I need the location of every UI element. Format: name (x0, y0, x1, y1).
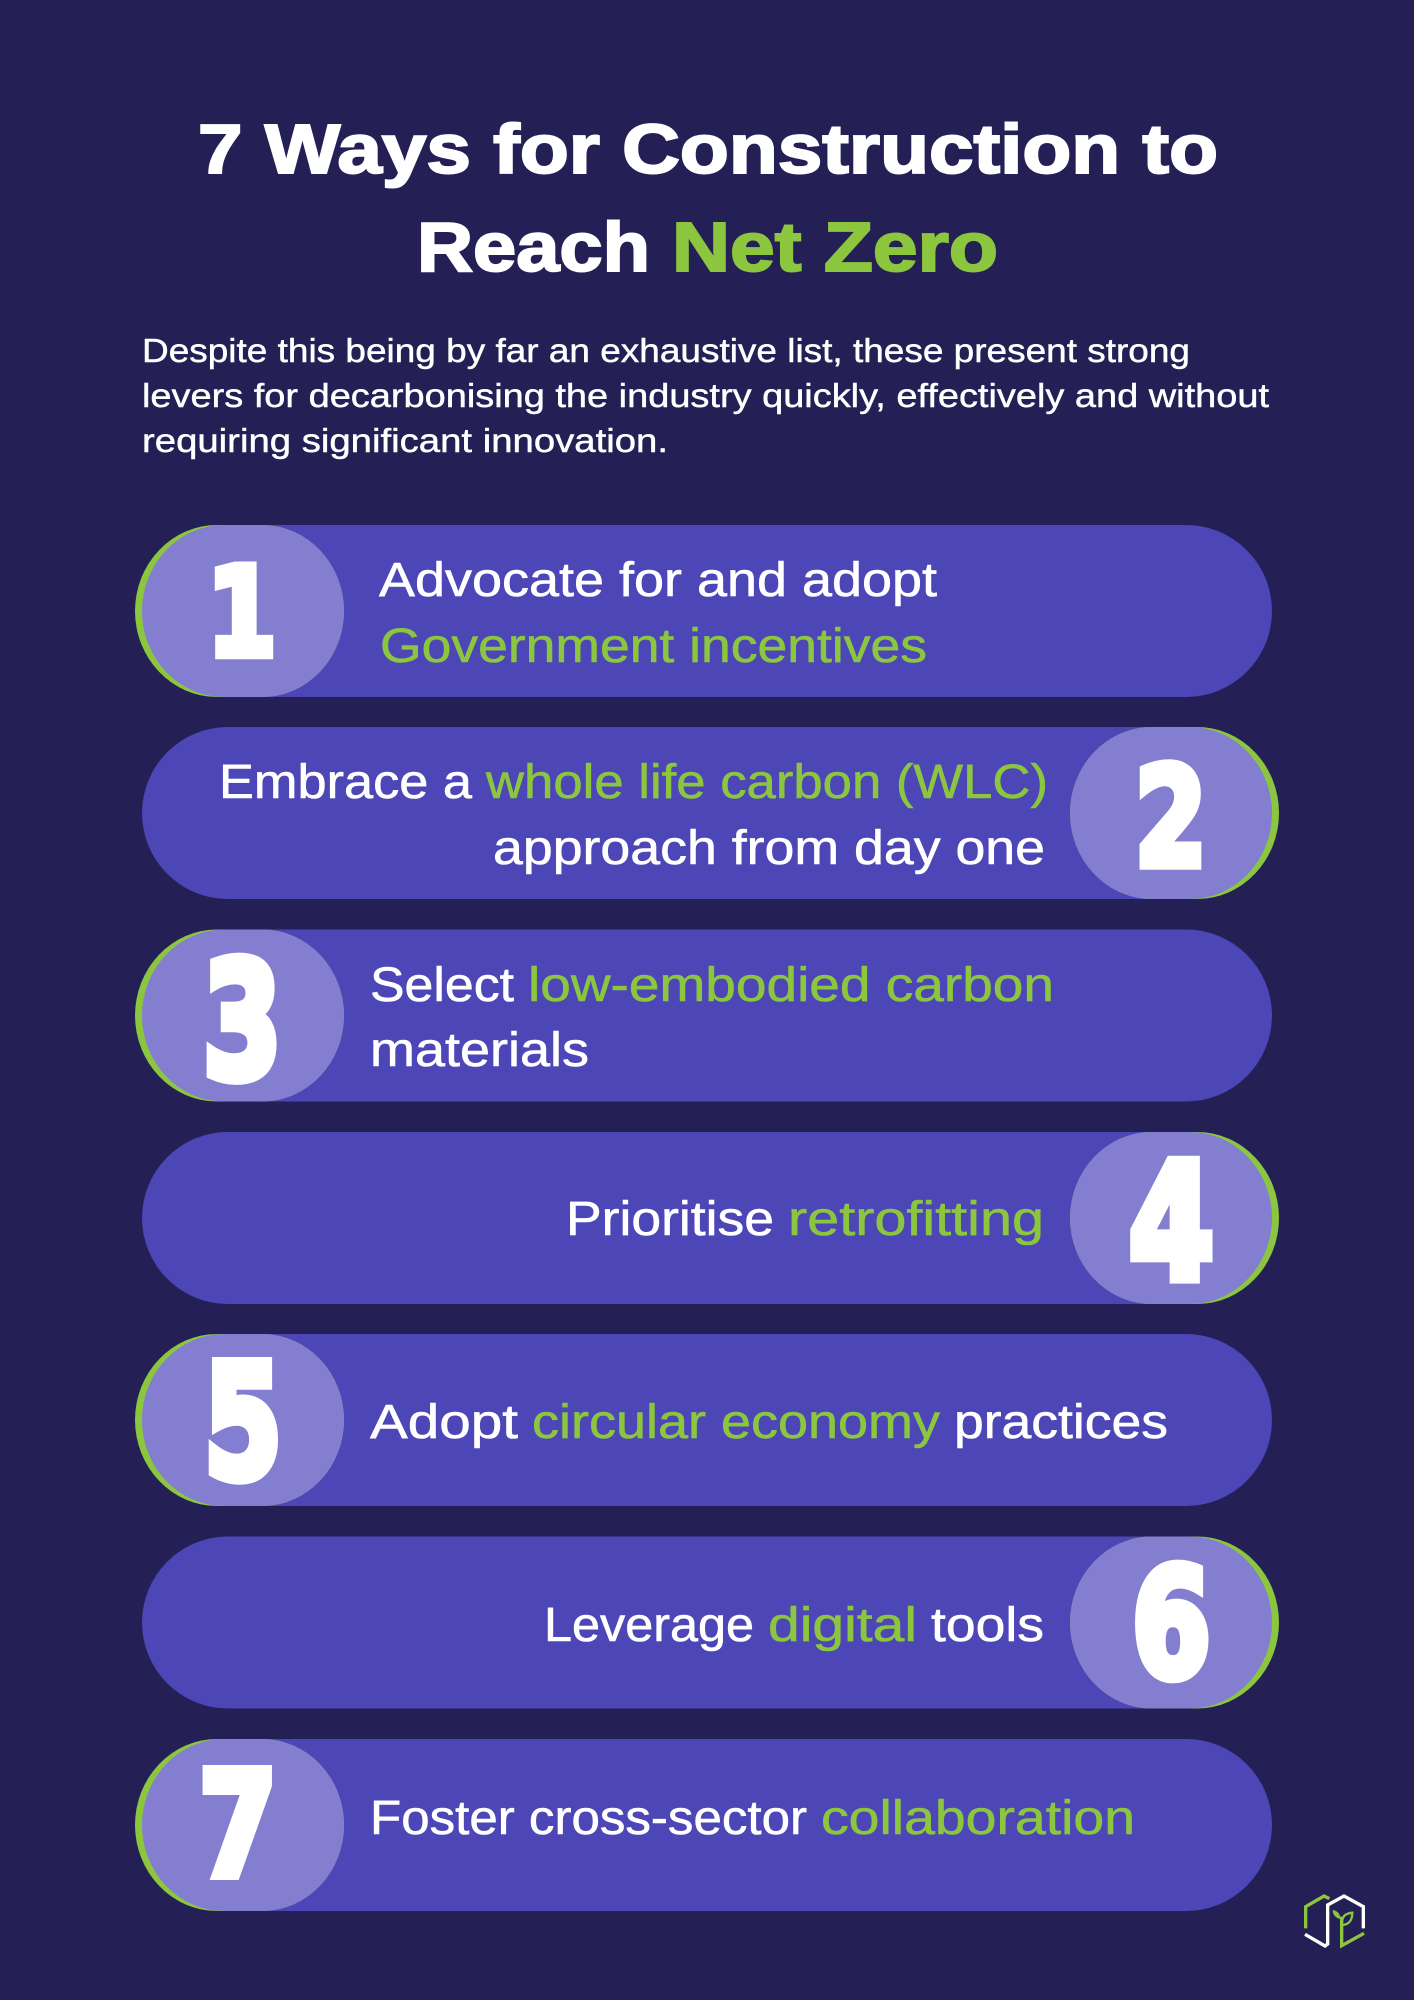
intro paragraph: Despite this being by far an exhaustive list, these present strong (142, 332, 1190, 369)
title: Reach (417, 208, 650, 286)
panel: item 5: 5 (204, 1332, 282, 1515)
title (198, 110, 1218, 286)
panel: item 6: 6 (1132, 1538, 1211, 1712)
intro paragraph: levers for decarbonising the industry quickly, effectively and without (142, 377, 1269, 414)
panel: item 3 (135, 928, 1272, 1115)
panel: item 4: retrofitting (788, 1193, 1044, 1246)
panel: item 6: Leverage (544, 1599, 754, 1652)
panel: item 2: Embrace a (219, 756, 472, 809)
intro paragraph: requiring significant innovation. (142, 422, 668, 459)
panel: item 7: Foster cross-sector (370, 1792, 807, 1845)
panel: item 6 (142, 1536, 1279, 1712)
panel: item 5: circular economy (532, 1396, 940, 1449)
panel: item 4 (142, 1130, 1279, 1316)
panel: item 5 (135, 1332, 1272, 1515)
panel: item 7: 7 (199, 1742, 277, 1910)
panel: item 7: collaboration (821, 1792, 1135, 1845)
title: 7 Ways for Construction to (198, 110, 1218, 188)
panel: item 1: 1 (207, 542, 277, 685)
panel: item 2: whole life carbon (WLC) (485, 756, 1048, 809)
panel: item 3: Select (370, 959, 514, 1012)
icon: logo house with sprout (1305, 1896, 1364, 1946)
panel: item 5: practices (954, 1396, 1168, 1449)
panel: item 5: Adopt (370, 1396, 518, 1449)
panel: item 3: 3 (203, 928, 282, 1115)
panel: item 3: low-embodied carbon (528, 959, 1054, 1012)
panel: item 1: Government incentives (380, 620, 927, 673)
panel: item 2: 2 (1135, 740, 1207, 898)
panel: item 3: materials (370, 1024, 589, 1077)
panel: item 7 (135, 1739, 1272, 1911)
panel: item 2: approach from day one (493, 822, 1045, 875)
panel: item 4: Prioritise (566, 1193, 774, 1246)
panel: item 4: 4 (1129, 1130, 1214, 1316)
panel: item 6: digital (768, 1599, 917, 1652)
panel: item 1 (135, 525, 1272, 697)
panel: item 2 (142, 727, 1279, 899)
panel: item 6: tools (931, 1599, 1044, 1652)
panel: item 1: Advocate for and adopt (379, 554, 937, 607)
title: Net Zero (672, 208, 998, 286)
intro paragraph (142, 332, 1269, 459)
